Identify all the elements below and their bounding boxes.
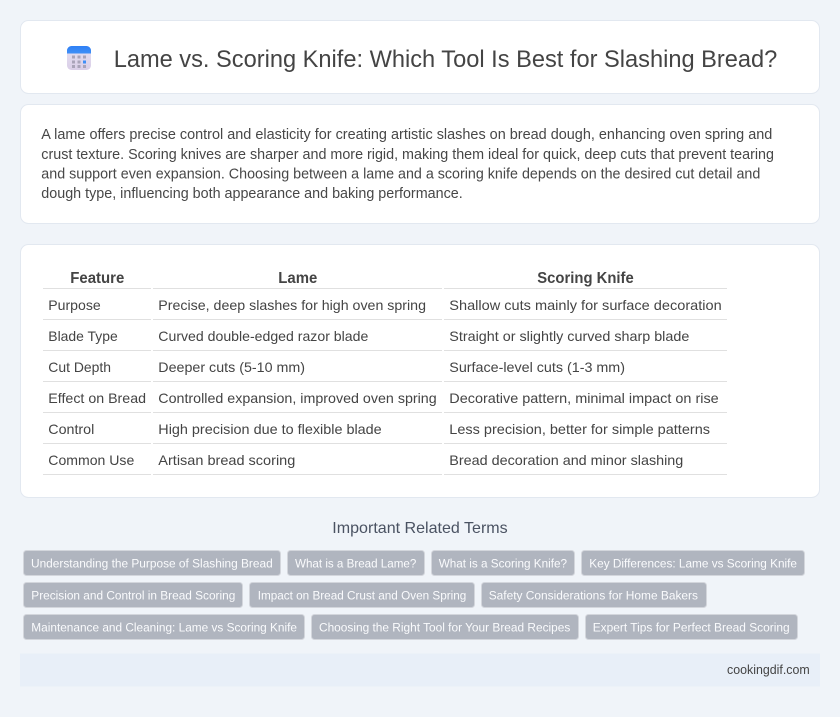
row: control: High precision due to flexible blade — [158, 421, 382, 437]
row: purpose: Precise, deep slashes for high oven spring — [158, 297, 426, 313]
table header row: Feature — [70, 270, 125, 287]
table header row: Lame — [278, 270, 318, 287]
row: purpose — [48, 297, 722, 313]
intro paragraph: dough type, influencing both appearance and baking performance. — [41, 186, 463, 202]
title: Lame vs. Scoring Knife: Which Tool Is Best for Slashing Bread? — [114, 46, 777, 73]
tags: related terms — [24, 550, 804, 640]
intro paragraph — [41, 127, 774, 202]
tag: Maintenance and Cleaning: Lame vs Scoring Knife — [31, 620, 297, 634]
tag: Understanding the Purpose of Slashing Bread — [31, 556, 273, 570]
footer bar — [20, 654, 820, 686]
tag: Expert Tips for Perfect Bread Scoring — [593, 620, 790, 634]
row: cut depth: Cut Depth — [48, 359, 111, 375]
table header row — [70, 270, 634, 287]
tag: Precision and Control in Bread Scoring — [31, 588, 235, 602]
panel: header — [20, 20, 820, 94]
row: purpose: Shallow cuts mainly for surface decoration — [449, 297, 722, 313]
tag — [250, 582, 474, 608]
tag — [24, 582, 242, 608]
row: effect on bread: Controlled expansion, improved oven spring — [158, 390, 437, 406]
row: cut depth — [48, 359, 625, 375]
tag — [288, 550, 424, 576]
tag: What is a Scoring Knife? — [439, 556, 567, 570]
row: common use: Common Use — [48, 452, 135, 468]
row: blade type: Curved double-edged razor blade — [158, 328, 369, 344]
row: effect on bread — [48, 390, 719, 406]
intro paragraph: crust texture. Scoring knives are sharper and more rigid, making them ideal for quick, deep cuts that prevent tearing — [41, 147, 774, 163]
tag — [582, 550, 804, 576]
footer credit: cookingdif.com — [727, 663, 810, 677]
tag: Key Differences: Lame vs Scoring Knife — [589, 556, 797, 570]
tag: Safety Considerations for Home Bakers — [489, 588, 698, 602]
row: cut depth: Deeper cuts (5-10 mm) — [158, 359, 305, 375]
heading: important related terms: Important Related Terms — [332, 520, 508, 537]
tag: What is a Bread Lame? — [295, 556, 416, 570]
row: blade type: Straight or slightly curved sharp blade — [449, 328, 690, 344]
intro paragraph: and support even expansion. Choosing between a lame and a scoring knife depends on the desired cut detail and — [41, 166, 760, 182]
tag — [312, 614, 578, 640]
tag — [432, 550, 574, 576]
row: common use: Bread decoration and minor slashing — [449, 452, 683, 468]
panel: comparison table — [20, 244, 820, 498]
row: blade type: Blade Type — [48, 328, 118, 344]
row: common use — [48, 452, 683, 468]
tag — [586, 614, 798, 640]
intro paragraph: A lame offers precise control and elasticity for creating artistic slashes on bread dough, enhancing oven spring and — [41, 127, 772, 143]
row: common use: Artisan bread scoring — [158, 452, 295, 468]
tag: Impact on Bread Crust and Oven Spring — [258, 588, 466, 602]
row: purpose: Purpose — [48, 297, 101, 313]
row: control — [48, 421, 710, 437]
icon: calendar — [67, 46, 91, 70]
tag — [24, 614, 304, 640]
row: control: Control — [48, 421, 94, 437]
table header row: Scoring Knife — [537, 270, 634, 287]
tag: Choosing the Right Tool for Your Bread Recipes — [319, 620, 570, 634]
tag — [482, 582, 706, 608]
row: cut depth: Surface-level cuts (1-3 mm) — [449, 359, 625, 375]
row: blade type — [48, 328, 690, 344]
row: control: Less precision, better for simple patterns — [449, 421, 710, 437]
tag — [24, 550, 280, 576]
panel: introduction text — [20, 104, 820, 224]
row: effect on bread: Decorative pattern, minimal impact on rise — [449, 390, 719, 406]
row: effect on bread: Effect on Bread — [48, 390, 146, 406]
